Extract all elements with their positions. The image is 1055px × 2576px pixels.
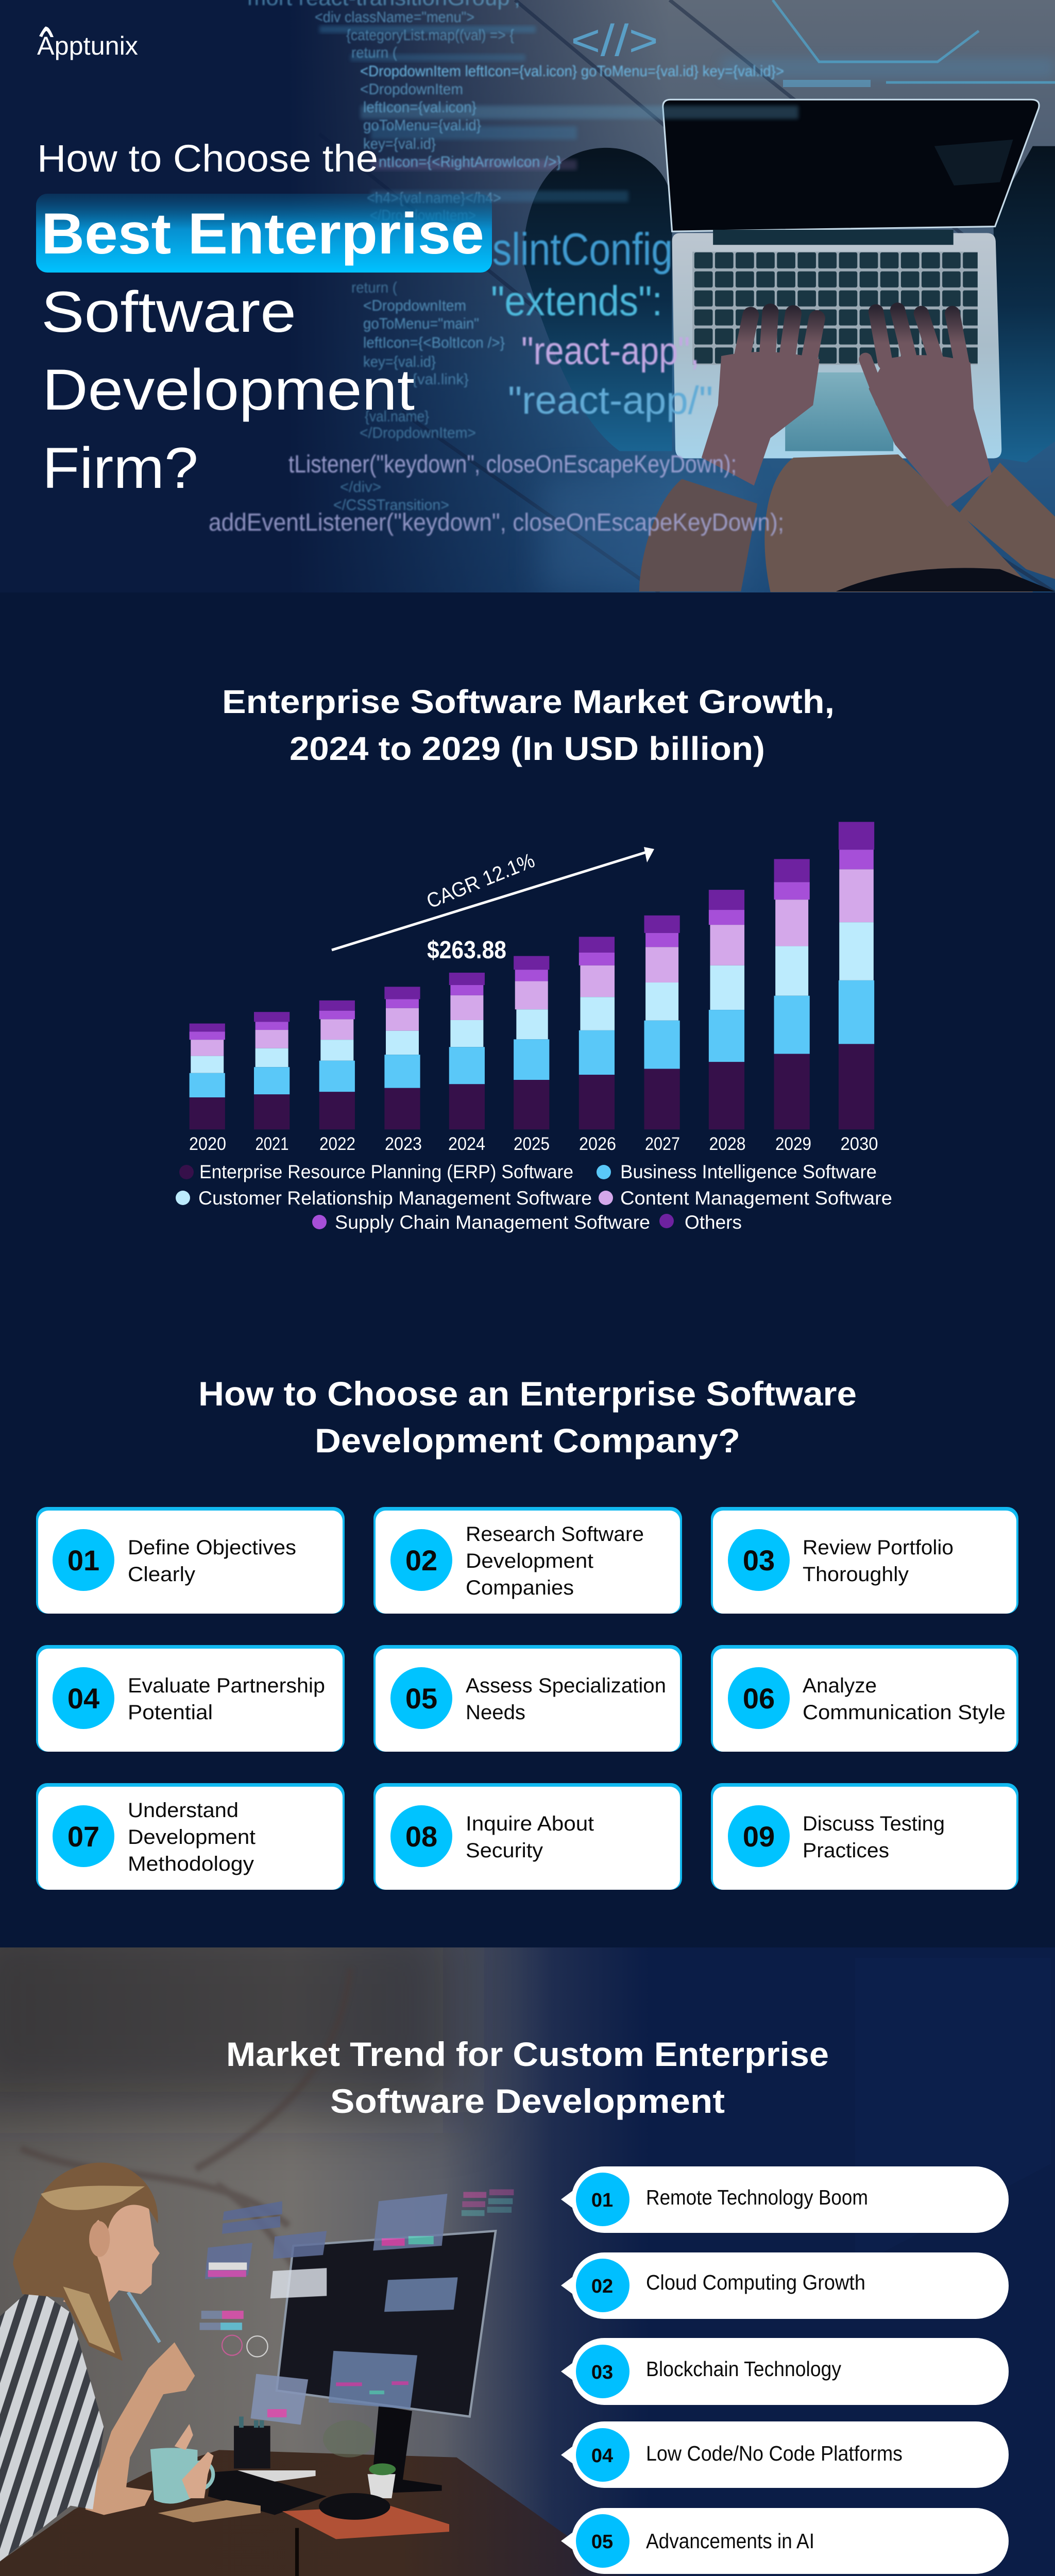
floating code text: {categoryList.map((val) => { xyxy=(346,27,514,44)
legend: Supply Chain Management Software xyxy=(335,1212,650,1233)
legend: Others xyxy=(685,1212,742,1233)
card 06: Analyze xyxy=(803,1674,877,1697)
trend item 01: 01 xyxy=(591,2190,613,2211)
hinge xyxy=(713,230,954,245)
card 07: 07 xyxy=(67,1820,99,1853)
right hand xyxy=(865,310,992,507)
axis: year labels: 2027 xyxy=(645,1134,680,1154)
card 02: 02 xyxy=(405,1544,437,1577)
bar 2027 xyxy=(644,916,680,1129)
bar 2026 xyxy=(579,937,615,1129)
card 01: 01 xyxy=(67,1544,99,1577)
card 05: Needs xyxy=(466,1701,525,1724)
card 08: 08 xyxy=(405,1820,437,1853)
wall backdrop xyxy=(0,1906,1055,2576)
large floating config text: "extends": xyxy=(491,278,662,325)
card 03 xyxy=(711,1507,1018,1614)
axis: year labels: 2030 xyxy=(841,1134,878,1154)
logo: Apptunix: Apptunix xyxy=(37,31,138,60)
axis: year labels: 2026 xyxy=(579,1134,616,1154)
card 07: Methodology xyxy=(128,1853,254,1875)
floating code text: <h4>{val.name}</h4> xyxy=(367,190,501,207)
floating code text: key={val.id} xyxy=(363,353,436,370)
floating code text: return ( xyxy=(351,279,397,296)
bar 2025 xyxy=(514,956,549,1129)
card 09 xyxy=(711,1783,1018,1890)
floating code text: <div className="menu"> xyxy=(315,9,474,26)
axis: year labels: 2023 xyxy=(385,1134,422,1154)
tan notebook xyxy=(158,2500,261,2522)
floating code text: <DropdownItem xyxy=(363,297,466,314)
trend item 05 xyxy=(561,2508,1009,2574)
right leg xyxy=(993,146,1055,463)
bar 2024 xyxy=(449,973,485,1129)
phone xyxy=(237,2470,316,2482)
trend item 04 xyxy=(561,2421,1009,2488)
card 07 xyxy=(36,1783,345,1890)
card 08: Security xyxy=(466,1839,543,1862)
card 07: Understand xyxy=(128,1799,239,1822)
shirt xyxy=(0,2286,104,2562)
card 01: Clearly xyxy=(128,1563,195,1586)
card 01 xyxy=(36,1507,345,1614)
card 02: Companies xyxy=(466,1577,574,1599)
floating code text: ntIcon={<RightArrowIcon />} xyxy=(379,154,561,171)
card 01: Define Objectives xyxy=(128,1536,296,1559)
large floating config text: addEventListener("keydown", closeOnEscapeKeyDown); xyxy=(209,509,784,536)
hair xyxy=(13,2163,158,2361)
legend: Content Management Software xyxy=(620,1188,892,1209)
floating code text: goToMenu="main" xyxy=(363,315,479,332)
heading: how to choose xyxy=(198,1375,857,1460)
plant xyxy=(367,2474,396,2498)
trend item 01 xyxy=(561,2166,1009,2233)
floating code text: </DropdownItem> xyxy=(360,425,476,442)
arm and hand xyxy=(86,2342,195,2515)
desk top xyxy=(0,2450,670,2576)
bar 2030 xyxy=(839,822,874,1129)
large floating config text: tListener("keydown", closeOnEscapeKeyDown); xyxy=(288,451,737,478)
card 05 xyxy=(373,1645,682,1752)
bar 2022 xyxy=(319,1001,355,1129)
legend: Enterprise Resource Planning (ERP) Software xyxy=(199,1161,573,1182)
floating code text: return ( xyxy=(351,44,397,61)
legend xyxy=(176,1161,892,1233)
floating code text: </DropdownItem> xyxy=(370,207,476,224)
floating code streaks xyxy=(319,26,1055,202)
hero backdrop: wooden floor fading to navy xyxy=(290,0,1055,592)
axis: year labels: 2028 xyxy=(709,1134,746,1154)
card 03: 03 xyxy=(743,1544,775,1577)
label: CAGR: CAGR 12.1% xyxy=(423,849,538,913)
card 02: Research Software xyxy=(466,1523,644,1546)
heading: market trend xyxy=(226,2035,829,2120)
panel: hero xyxy=(0,0,1055,592)
floating code text: leftIcon={val.icon} xyxy=(363,99,477,116)
card 04 xyxy=(36,1645,345,1752)
label: 2024 value: $263.88 xyxy=(427,937,506,964)
card 06: 06 xyxy=(743,1682,775,1715)
floating code text: </CSSTransition> xyxy=(333,497,449,514)
heading: market growth: Enterprise Software Market Growth, xyxy=(222,683,835,720)
highlight: best enterprise: Best Enterprise xyxy=(41,201,484,266)
floating code text: goToMenu={val.id} xyxy=(363,117,481,134)
axis: year labels: 2024 xyxy=(448,1134,485,1154)
card 07: Development xyxy=(128,1826,256,1849)
axis: year labels: 2022 xyxy=(319,1134,355,1154)
trend item 04: Low Code/No Code Platforms xyxy=(646,2442,903,2465)
heading: market trend: Software Development xyxy=(330,2082,725,2120)
large floating config text: "react-app", xyxy=(521,329,700,373)
card 06: Communication Style xyxy=(803,1701,1006,1724)
mug xyxy=(150,2448,197,2504)
card 02: Development xyxy=(466,1550,593,1572)
card 04: Potential xyxy=(128,1701,213,1724)
card 03: Review Portfolio xyxy=(803,1536,954,1559)
large floating config text: eslintConfig xyxy=(471,224,673,275)
tech glyph: code tag: <//> xyxy=(571,16,658,65)
axis: year labels: 2025 xyxy=(514,1134,550,1154)
axis: year labels: 2021 xyxy=(256,1134,288,1154)
neck and face xyxy=(63,2187,160,2313)
card 02 xyxy=(373,1507,682,1614)
card 09: 09 xyxy=(743,1820,775,1853)
woman at desk scene xyxy=(0,2163,670,2576)
legend: Business Intelligence Software xyxy=(620,1161,877,1182)
legend: Customer Relationship Management Software xyxy=(198,1188,592,1209)
laptop screen xyxy=(663,99,1039,231)
card 06 xyxy=(711,1645,1018,1752)
monitor xyxy=(277,2231,496,2417)
card 03: Thoroughly xyxy=(803,1563,909,1586)
card 08: Inquire About xyxy=(466,1812,594,1835)
floating code text: leftIcon={<BoltIcon />} xyxy=(363,334,505,351)
floating code text xyxy=(247,0,784,514)
trend item 05: Advancements in AI xyxy=(646,2529,814,2553)
heading: market growth: 2024 to 2029 (In USD billion) xyxy=(290,730,765,767)
heading: how to choose: Development Company? xyxy=(315,1421,740,1460)
trend item 03: 03 xyxy=(591,2362,613,2383)
card 05: 05 xyxy=(405,1682,437,1715)
axis: year labels: 2029 xyxy=(775,1134,811,1154)
trend item 03: Blockchain Technology xyxy=(646,2357,841,2381)
large floating config text: "react-app/" xyxy=(508,379,713,422)
pen holder xyxy=(234,2426,270,2468)
floating code text: {val.link} xyxy=(412,371,469,388)
heading: how to choose: How to Choose an Enterprise Software xyxy=(198,1375,857,1413)
left hand xyxy=(702,312,820,485)
touchpad xyxy=(785,372,893,451)
laptop base xyxy=(672,233,1001,459)
bar 2028 xyxy=(709,890,744,1129)
chart: stacked bars 2020-2030 xyxy=(190,822,874,1129)
floating code text: <DropdownItem leftIcon={val.icon} goToMenu={val.id} key={val.id}> xyxy=(360,63,784,80)
title: development: Development xyxy=(42,358,415,422)
title: software: Software xyxy=(41,280,296,344)
bar 2021 xyxy=(254,1012,290,1129)
trend item 02: Cloud Computing Growth xyxy=(646,2270,865,2294)
card 08 xyxy=(373,1783,682,1890)
pencil xyxy=(128,2292,160,2342)
heading: market trend: Market Trend for Custom Enterprise xyxy=(226,2035,829,2073)
floating code text: <DropdownItem xyxy=(360,81,463,98)
mouse xyxy=(319,2493,390,2520)
left leg xyxy=(523,148,672,451)
trend item 02 xyxy=(561,2252,1009,2319)
bar 2023 xyxy=(384,987,420,1129)
floating code text: </div> xyxy=(340,479,381,496)
bar 2020 xyxy=(190,1024,225,1129)
card 09: Discuss Testing xyxy=(803,1812,945,1835)
orange notebook xyxy=(282,2505,449,2539)
heading: market growth xyxy=(222,683,835,767)
card 09: Practices xyxy=(803,1839,889,1862)
trend item 05: 05 xyxy=(591,2531,613,2553)
card 04: 04 xyxy=(67,1682,99,1715)
tech glyph: code tag xyxy=(571,0,1055,87)
trend item 02: 02 xyxy=(591,2276,613,2297)
floating code text: {val.name} xyxy=(365,408,429,425)
trend item 04: 04 xyxy=(591,2445,613,2467)
bar 2029 xyxy=(774,859,810,1129)
keyboard xyxy=(692,252,978,365)
axis: year labels: 2020 xyxy=(189,1134,226,1154)
trend item 03 xyxy=(561,2338,1009,2405)
arrow: CAGR trend xyxy=(332,847,654,950)
card 04: Evaluate Partnership xyxy=(128,1674,325,1697)
floating code text: key={val.id} xyxy=(363,135,436,152)
title: how to choose the: How to Choose the xyxy=(37,137,378,180)
floating UI cards xyxy=(200,2189,514,2425)
card 05: Assess Specialization xyxy=(466,1674,666,1697)
hero photo: laptop on lap from above xyxy=(523,99,1055,592)
sweater xyxy=(764,454,1033,592)
keyboard xyxy=(208,2470,327,2515)
panel: market trend xyxy=(0,1906,1055,2576)
title: firm: Firm? xyxy=(42,436,198,500)
axis: year labels xyxy=(189,1134,878,1154)
trend item 01: Remote Technology Boom xyxy=(646,2185,868,2209)
monitor stand xyxy=(373,2405,442,2493)
large floating config text xyxy=(209,224,784,536)
